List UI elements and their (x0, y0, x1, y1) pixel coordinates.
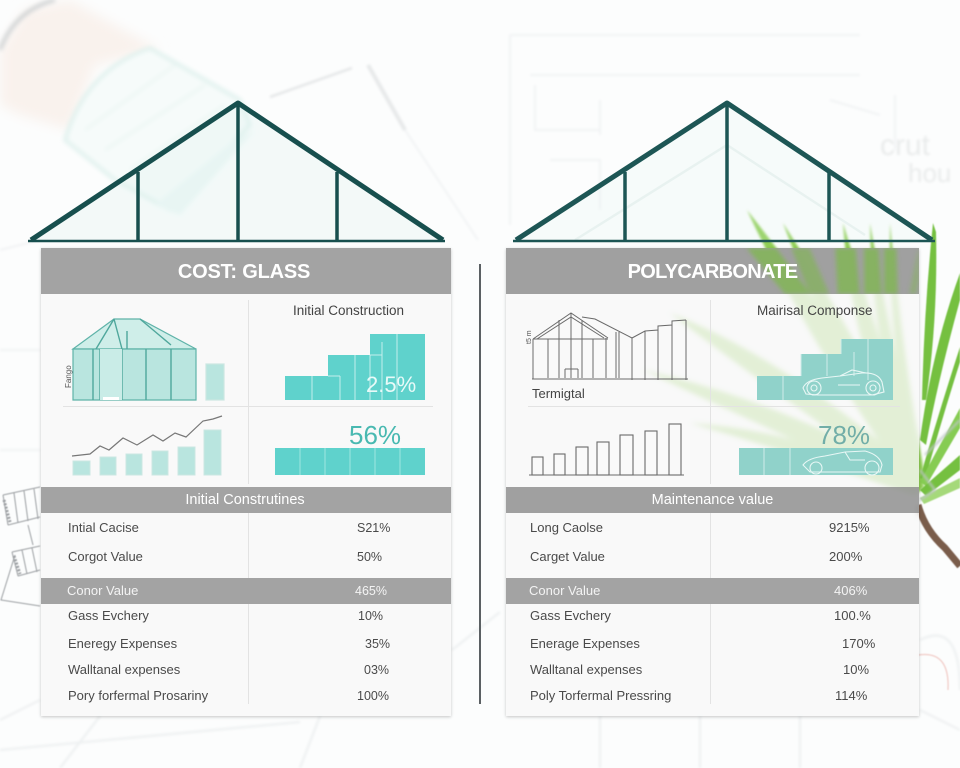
panel: polycarbonate: 114% (835, 688, 867, 703)
panel: polycarbonate: 200% (829, 549, 862, 564)
row: energy expenses: Eneregy Expenses (68, 636, 177, 651)
icon: glass roof (28, 100, 445, 242)
table band: conor value (506, 578, 919, 604)
row: long cacise: Long Caolse (530, 520, 603, 535)
panel: polycarbonate (506, 248, 919, 716)
chart: material stepped bars with car (739, 339, 893, 476)
label: terminal: Termigtal (532, 386, 585, 401)
chart: 78% bar with car (739, 420, 893, 475)
center divider (479, 264, 481, 704)
panel heading: glass (41, 248, 451, 294)
background faint words (880, 129, 951, 188)
panel: polycarbonate: 100.% (834, 608, 871, 623)
band label: Conor Value (529, 583, 600, 598)
panel: polycarbonate: 170% (842, 636, 875, 651)
axis label: t5 m (526, 330, 533, 344)
panel: glass: 50% (357, 550, 382, 564)
chart: 56% bar (275, 420, 425, 475)
row: gass evchery: Gass Evchery (530, 608, 611, 623)
table band: maintenance value (506, 487, 919, 513)
chart heading: material compose: Mairisal Componse (757, 303, 873, 318)
line and bar chart (72, 416, 222, 475)
chart: initial construction stepped bars: 2.5% (366, 372, 416, 397)
row: carget value: Carget Value (530, 549, 605, 564)
panel: glass: 35% (365, 637, 390, 651)
table band: initial constructines (41, 487, 451, 513)
row: walltanal expenses: Walltanal expenses (530, 662, 642, 677)
panel: glass: S21% (357, 521, 390, 535)
panel: polycarbonate: 10% (843, 662, 869, 677)
row: corgot value: Corgot Value (68, 549, 143, 564)
table band: maintenance value: Maintenance value (652, 492, 773, 508)
table band: initial constructines: Initial Construtines (185, 492, 305, 508)
outline bar chart (529, 424, 684, 475)
row: gass evchery: Gass Evchery (68, 608, 149, 623)
background faint words: hou (908, 158, 951, 188)
icon: glass greenhouse (64, 318, 225, 476)
panel: glass: 10% (358, 609, 383, 623)
chart heading: initial construction: Initial Construction (293, 303, 404, 318)
band value: 406% (834, 583, 867, 598)
background faint words: crut (880, 129, 931, 162)
row: initial cacise: Intial Cacise (68, 520, 139, 535)
chart: 56% bar: 56% (349, 420, 401, 450)
panel heading: polycarbonate (506, 248, 919, 294)
panel heading: glass: COST: GLASS (178, 261, 310, 283)
panel heading: polycarbonate: POLYCARBONATE (628, 261, 797, 283)
row: energe expenses: Enerage Expenses (530, 636, 640, 651)
band value: 465% (355, 584, 387, 598)
panel: glass (41, 248, 451, 716)
blueprint fragment lower left (1, 487, 40, 606)
axis label: Fango (64, 365, 73, 388)
icon: polycarbonate roof (513, 100, 935, 242)
panel: glass: 100% (357, 689, 389, 703)
row: poly: Poly Torfermal Pressring (530, 688, 671, 703)
icon: polycarbonate greenhouse outline (526, 312, 688, 476)
chart: 78% bar with car: 78% (818, 420, 870, 450)
plant fronds (643, 210, 925, 496)
band label: Conor Value (67, 583, 138, 598)
row: poly: Pory forfermal Prosariny (68, 688, 208, 703)
table band: conor value (41, 578, 451, 604)
chart: initial construction stepped bars (275, 334, 425, 475)
panel: glass: 03% (364, 663, 389, 677)
row: walltanal expenses: Walltanal expenses (68, 662, 180, 677)
panel: polycarbonate: 9215% (829, 520, 869, 535)
